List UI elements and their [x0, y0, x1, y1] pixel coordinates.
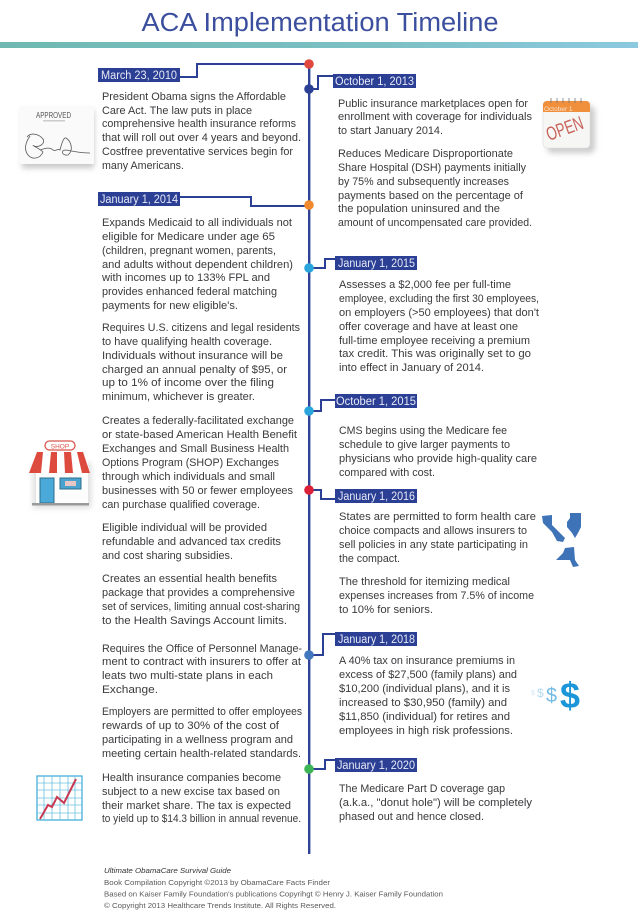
text block: medical expense threshold: expenses increases from 7.5% of income — [339, 590, 534, 602]
text block: physician fee schedule: schedule to give larger payments to — [339, 439, 510, 451]
title: ACA Implementation Timeline — [142, 9, 498, 37]
text block: March 2010 signing: many Americans. — [102, 160, 184, 172]
text block: physician fee schedule — [339, 425, 537, 479]
icon: dollar signs: $ — [546, 685, 557, 707]
text block: DSH payments: Share Hospital (DSH) payments initially — [338, 162, 526, 174]
text block: essential benefits: package that provides a comprehensive — [102, 587, 295, 599]
text block: employer fee: full-time employee receiving a premium — [339, 335, 530, 347]
text block: employer fee: employee, excluding the first 30 employees, — [339, 293, 539, 305]
text block: Office of Personnel Management: leats two multi-state plans in each — [102, 670, 273, 682]
text block: medical expense threshold — [339, 576, 534, 616]
text block: employer fee: into effect in January of 2014. — [339, 362, 484, 374]
text block: March 2010 signing: that will roll out over 4 years and beyond. — [102, 132, 301, 144]
text block: exchanges: or state-based American Health Benefit — [102, 429, 298, 441]
text block: health care choice compacts: the compact. — [339, 553, 400, 565]
text block: employer fee: tax credit. This was originally set to go — [339, 348, 531, 360]
text block: tax credits: and cost sharing subsidies. — [102, 550, 233, 562]
text block: Office of Personnel Management: Requires the Office of Personnel Manage- — [102, 643, 302, 655]
footer credits: Book Compilation Copyright ©2013 by ObamaCare Facts Finder — [104, 878, 330, 887]
text block: employer fee: on employers (>50 employees) that don't — [339, 307, 540, 319]
text block: Medicaid expansion: with incomes up to 133% FPL and — [101, 272, 270, 284]
text block: exchanges: can purchase qualified coverage. — [102, 499, 260, 511]
text block: Medicare Part D: The Medicare Part D coverage gap — [339, 783, 505, 795]
date label: October 1, 2015: October 1, 2015 — [336, 396, 416, 408]
text block: wellness rewards: rewards of up to 30% of the cost of — [102, 720, 280, 732]
text block: employer fee — [339, 279, 540, 374]
text block: excise tax: subject to a new excise tax based on — [102, 786, 280, 798]
New York — [556, 547, 579, 567]
text block: health care choice compacts: States are permitted to form health care — [339, 511, 536, 523]
text block: premium tax — [339, 655, 517, 737]
text block: Medicare Part D — [339, 783, 532, 823]
text block: qualifying coverage: up to 1% of income over the filing — [102, 377, 274, 389]
text block: qualifying coverage — [102, 322, 300, 403]
text block: marketplaces open — [338, 98, 532, 137]
icon: shop storefront: SHOP — [51, 444, 69, 450]
connector: January 1, 2014 — [180, 197, 309, 206]
text block: DSH payments: by 75% and subsequently increases — [338, 176, 509, 188]
footer credits: Based on Kaiser Family Foundation's publications Copyrihgt © Henry J. Kaiser Family Foundation — [104, 890, 443, 898]
text block: exchanges: Options Program (SHOP) Exchanges — [102, 457, 279, 469]
text block: qualifying coverage: Requires U.S. citizens and legal residents — [102, 322, 300, 334]
text block: March 2010 signing: President Obama signs the Affordable — [102, 91, 286, 103]
text block: exchanges: businesses with 50 or fewer employees — [102, 485, 293, 497]
icon: dollar signs — [531, 675, 580, 716]
text block: Medicaid expansion: eligible for Medicare under age 65 — [102, 231, 275, 243]
text block: qualifying coverage: minimum, whichever is greater. — [102, 391, 255, 403]
text block: marketplaces open: Public insurance marketplaces open for — [338, 98, 528, 110]
text block: DSH payments — [338, 148, 532, 229]
text block: essential benefits: set of services, limiting annual cost-sharing — [102, 601, 300, 613]
icon: dollar signs: $ — [537, 686, 544, 700]
icon: October 1 open calendar: OPEN — [544, 113, 586, 146]
timeline dot: January 2020 — [304, 764, 314, 774]
icon: dollar signs: $ — [560, 675, 580, 716]
text block: physician fee schedule: CMS begins using the Medicare fee — [339, 425, 507, 437]
text block: tax credits: refundable and advanced tax credits — [102, 536, 281, 548]
timeline dot: January 2014 — [304, 200, 314, 210]
text block: Medicaid expansion: payments for new eligible's. — [102, 300, 238, 312]
text block: premium tax: $10,200 (individual plans), and it is — [339, 683, 510, 695]
date label: January 1, 2014: January 1, 2014 — [100, 194, 179, 206]
text block: exchanges — [102, 415, 298, 511]
text block: premium tax: excess of $27,500 (family plans) and — [339, 669, 517, 681]
icon: October 1 open calendar: October 1 — [544, 106, 573, 113]
text block: March 2010 signing: comprehensive health insurance reforms — [102, 118, 296, 130]
date label: March 23, 2010: March 23, 2010 — [101, 70, 177, 82]
icon: rising line chart — [37, 776, 82, 820]
text block: physician fee schedule: compared with cost. — [339, 467, 435, 479]
text block: DSH payments: Reduces Medicare Disproportionate — [338, 148, 513, 160]
text block: exchanges: Creates a federally-facilitated exchange — [102, 415, 294, 427]
icon: state shapes — [542, 513, 581, 567]
text block: essential benefits: to the Health Savings Account limits. — [102, 615, 287, 627]
connector: March 23, 2010 — [180, 64, 309, 77]
text block: tax credits: Eligible individual will be provided — [102, 522, 267, 534]
date label: January 1, 2015: January 1, 2015 — [338, 258, 415, 270]
text block: excise tax: Health insurance companies become — [102, 772, 281, 784]
text block: Medicaid expansion: provides enhanced federal matching — [102, 286, 277, 298]
text block: marketplaces open: to start January 2014. — [338, 125, 443, 137]
text block: qualifying coverage: Individuals without insurance will be — [102, 350, 283, 362]
text block: Medicare Part D: (a.k.a., "donut hole") will be completely — [339, 797, 532, 809]
icon: dollar signs: $ — [531, 690, 535, 697]
text block: DSH payments: payments based on the percentage of — [338, 190, 524, 202]
connector: January 1, 2015 — [309, 259, 335, 268]
text block: health care choice compacts — [339, 511, 536, 565]
icon: approved signature: APPROVED — [36, 111, 71, 120]
text block: exchanges: through which individuals and small — [102, 471, 275, 483]
icon: approved signature — [19, 106, 94, 168]
Illinois — [567, 513, 581, 538]
text block: Medicare Part D: phased out and hence closed. — [339, 811, 484, 823]
text block: wellness rewards — [102, 706, 302, 760]
text block: Medicaid expansion: Expands Medicaid to all individuals not — [102, 217, 293, 229]
text block: wellness rewards: meeting certain health-related standards. — [102, 748, 301, 760]
text block: marketplaces open: enrollment with coverage for individuals — [338, 111, 532, 123]
text block: Office of Personnel Management: ment to contract with insurers to offer at — [102, 656, 302, 668]
footer credits: © Copyright 2013 Healthcare Trends Institute. All Rights Reserved. — [104, 901, 336, 910]
header teal bar — [0, 42, 638, 48]
text block: Office of Personnel Management — [102, 643, 302, 696]
footer credits — [104, 866, 443, 910]
text block: exchanges: Exchanges and Small Business Health — [102, 443, 289, 455]
text block: health care choice compacts: sell policies in any state participating in — [339, 539, 528, 551]
text block: premium tax: employees in high risk professions. — [339, 725, 513, 737]
text block: DSH payments: the population uninsured and the — [338, 203, 500, 215]
date label: January 1, 2018: January 1, 2018 — [338, 634, 415, 646]
text block: Medicaid expansion: (children, pregnant women, parents, — [102, 245, 276, 257]
timeline dot: January 2015 — [304, 263, 314, 273]
text block: medical expense threshold: to 10% for seniors. — [339, 604, 433, 616]
timeline dot: October 2013 — [304, 84, 314, 94]
connector: October 1, 2013 — [309, 76, 334, 89]
timeline dot: March 2010 — [304, 59, 314, 69]
footer credits: Ultimate ObamaCare Survival Guide — [104, 866, 231, 875]
text block: excise tax: to yield up to $14.3 billion in annual revenue. — [102, 813, 301, 825]
text block: excise tax — [102, 772, 301, 825]
timeline axis — [180, 59, 335, 854]
text block: medical expense threshold: The threshold for itemizing medical — [339, 576, 510, 588]
icon: October 1 open calendar — [543, 98, 595, 153]
text block: March 2010 signing — [102, 91, 301, 172]
text block: March 2010 signing: Care Act. The law puts in place — [102, 105, 252, 117]
text block: wellness rewards: participating in a wellness program and — [102, 734, 293, 746]
date label: October 1, 2013: October 1, 2013 — [335, 76, 414, 88]
text block: essential benefits: Creates an essential health benefits — [102, 573, 277, 585]
text block: premium tax: A 40% tax on insurance premiums in — [339, 655, 515, 667]
text block: employer fee: offer coverage and have at least one — [339, 321, 518, 333]
date label: January 1, 2020: January 1, 2020 — [337, 760, 415, 772]
timeline dot: October 2015 — [304, 406, 314, 416]
connector: January 1, 2016 — [309, 490, 335, 499]
text block: qualifying coverage: to have qualifying health coverage. — [102, 336, 272, 348]
connector: January 1, 2020 — [309, 760, 335, 769]
text block: essential benefits — [102, 573, 300, 627]
text block: wellness rewards: Employers are permitted to offer employees — [102, 706, 302, 718]
text block: excise tax: their market share. The tax is expected — [102, 800, 291, 812]
date label: January 1, 2016: January 1, 2016 — [338, 491, 415, 503]
text block: physician fee schedule: physicians who provide high-quality care — [339, 453, 537, 465]
text block: employer fee: Assesses a $2,000 fee per full-time — [339, 279, 511, 291]
timeline dot: January 2018 — [304, 650, 314, 660]
California — [542, 515, 565, 542]
text block: tax credits — [102, 522, 281, 562]
text block: March 2010 signing: Costfree preventative services begin for — [102, 146, 293, 158]
text block: Office of Personnel Management: Exchange. — [102, 684, 158, 696]
connector: January 1, 2018 — [309, 634, 335, 655]
connector: October 1, 2015 — [309, 400, 335, 411]
text block: premium tax: $11,850 (individual) for retires and — [339, 711, 510, 723]
text block: DSH payments: amount of uncompensated care provided. — [338, 217, 532, 229]
text block: qualifying coverage: charged an annual penalty of $95, or — [102, 364, 287, 376]
text block: health care choice compacts: choice compacts and allows insurers to — [339, 525, 527, 537]
text block: Medicaid expansion: and adults without dependent children) — [102, 259, 293, 271]
text block: premium tax: increased to $30,950 (family) and — [339, 697, 507, 709]
timeline dot: January 2016 — [304, 485, 314, 495]
text block: Medicaid expansion — [101, 217, 293, 312]
icon: shop storefront — [29, 441, 91, 508]
